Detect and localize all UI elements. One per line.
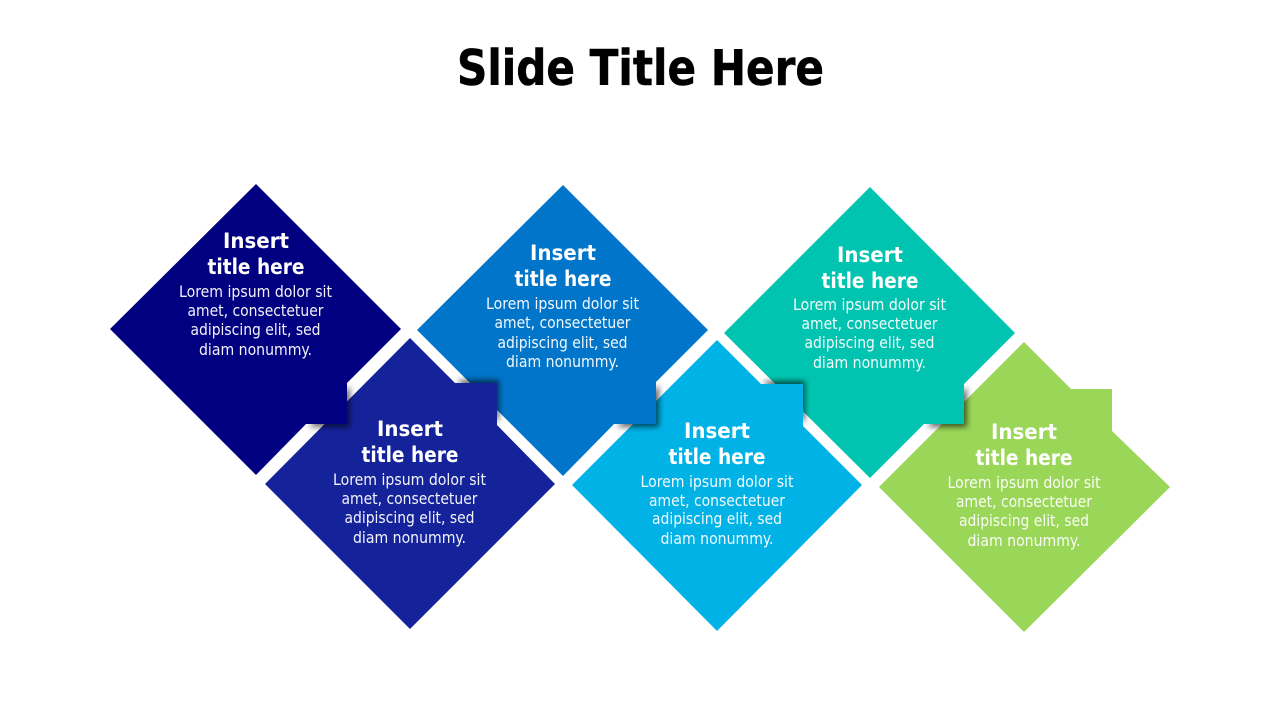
- body text 5: [793, 295, 946, 372]
- body text 4: diam nonummy.: [660, 529, 774, 548]
- body text 3: [486, 294, 639, 371]
- heading 2: Insert: [377, 417, 443, 442]
- body text 5: amet, consectetuer: [802, 314, 938, 333]
- body text 2: diam nonummy.: [353, 528, 466, 547]
- body text 6: [948, 473, 1101, 550]
- body text 6: diam nonummy.: [968, 531, 1080, 550]
- heading 6: [976, 420, 1072, 471]
- heading 4: [668, 419, 766, 470]
- heading 5: Insert: [837, 243, 903, 268]
- body text 5: Lorem ipsum dolor sit: [793, 295, 946, 314]
- body text 6: adipiscing elit, sed: [959, 511, 1089, 530]
- body text 6: amet, consectetuer: [956, 492, 1092, 511]
- heading 4: title here: [668, 445, 766, 470]
- body text 3: diam nonummy.: [506, 352, 619, 371]
- panel: diamond 5 teal: [724, 187, 1015, 478]
- heading 1: [208, 229, 304, 280]
- body text 4: [640, 472, 794, 548]
- heading 1: title here: [208, 255, 304, 280]
- diamond shape 1: [110, 184, 401, 475]
- body text 2: Lorem ipsum dolor sit: [333, 470, 486, 489]
- body text 1: amet, consectetuer: [188, 301, 324, 320]
- heading 4: Insert: [684, 419, 750, 444]
- body text 4: Lorem ipsum dolor sit: [640, 472, 794, 491]
- heading 2: title here: [362, 443, 458, 468]
- body text 1: diam nonummy.: [199, 340, 312, 359]
- body text 6: Lorem ipsum dolor sit: [948, 473, 1101, 492]
- heading 3: Insert: [530, 241, 596, 266]
- heading 3: title here: [514, 267, 612, 292]
- title: Slide Title Here: [457, 40, 824, 97]
- heading 5: title here: [822, 269, 918, 294]
- heading 6: title here: [976, 446, 1072, 471]
- diamond shape 3: [417, 185, 708, 476]
- heading 1: Insert: [223, 229, 289, 254]
- panel: diamond 6 green: [879, 342, 1170, 632]
- panel: diamond 1 navy: [110, 184, 401, 475]
- diamond shape 6: [879, 342, 1170, 632]
- diamond shape 2: [265, 338, 555, 629]
- body text 3: adipiscing elit, sed: [498, 333, 628, 352]
- heading 6: Insert: [991, 420, 1057, 445]
- heading 2: [362, 417, 458, 468]
- body text 2: amet, consectetuer: [342, 489, 478, 508]
- body text 2: [333, 470, 486, 547]
- body text 5: diam nonummy.: [813, 353, 926, 372]
- body text 1: Lorem ipsum dolor sit: [179, 282, 332, 301]
- body text 5: adipiscing elit, sed: [804, 333, 934, 352]
- panel: diamond 3 blue: [417, 185, 708, 476]
- panel: diamond 2 royal blue: [265, 338, 555, 629]
- body text 1: adipiscing elit, sed: [190, 320, 320, 339]
- body text 4: adipiscing elit, sed: [652, 509, 782, 528]
- diamond shape 5: [724, 187, 1015, 478]
- heading 3: [514, 241, 612, 292]
- body text 4: amet, consectetuer: [649, 491, 785, 510]
- panel: diamond 4 sky blue: [572, 340, 862, 631]
- body text 3: amet, consectetuer: [494, 313, 631, 332]
- body text 1: [179, 282, 332, 359]
- heading 5: [822, 243, 918, 294]
- body text 3: Lorem ipsum dolor sit: [486, 294, 639, 313]
- diamond shape 4: [572, 340, 862, 631]
- body text 2: adipiscing elit, sed: [344, 508, 474, 527]
